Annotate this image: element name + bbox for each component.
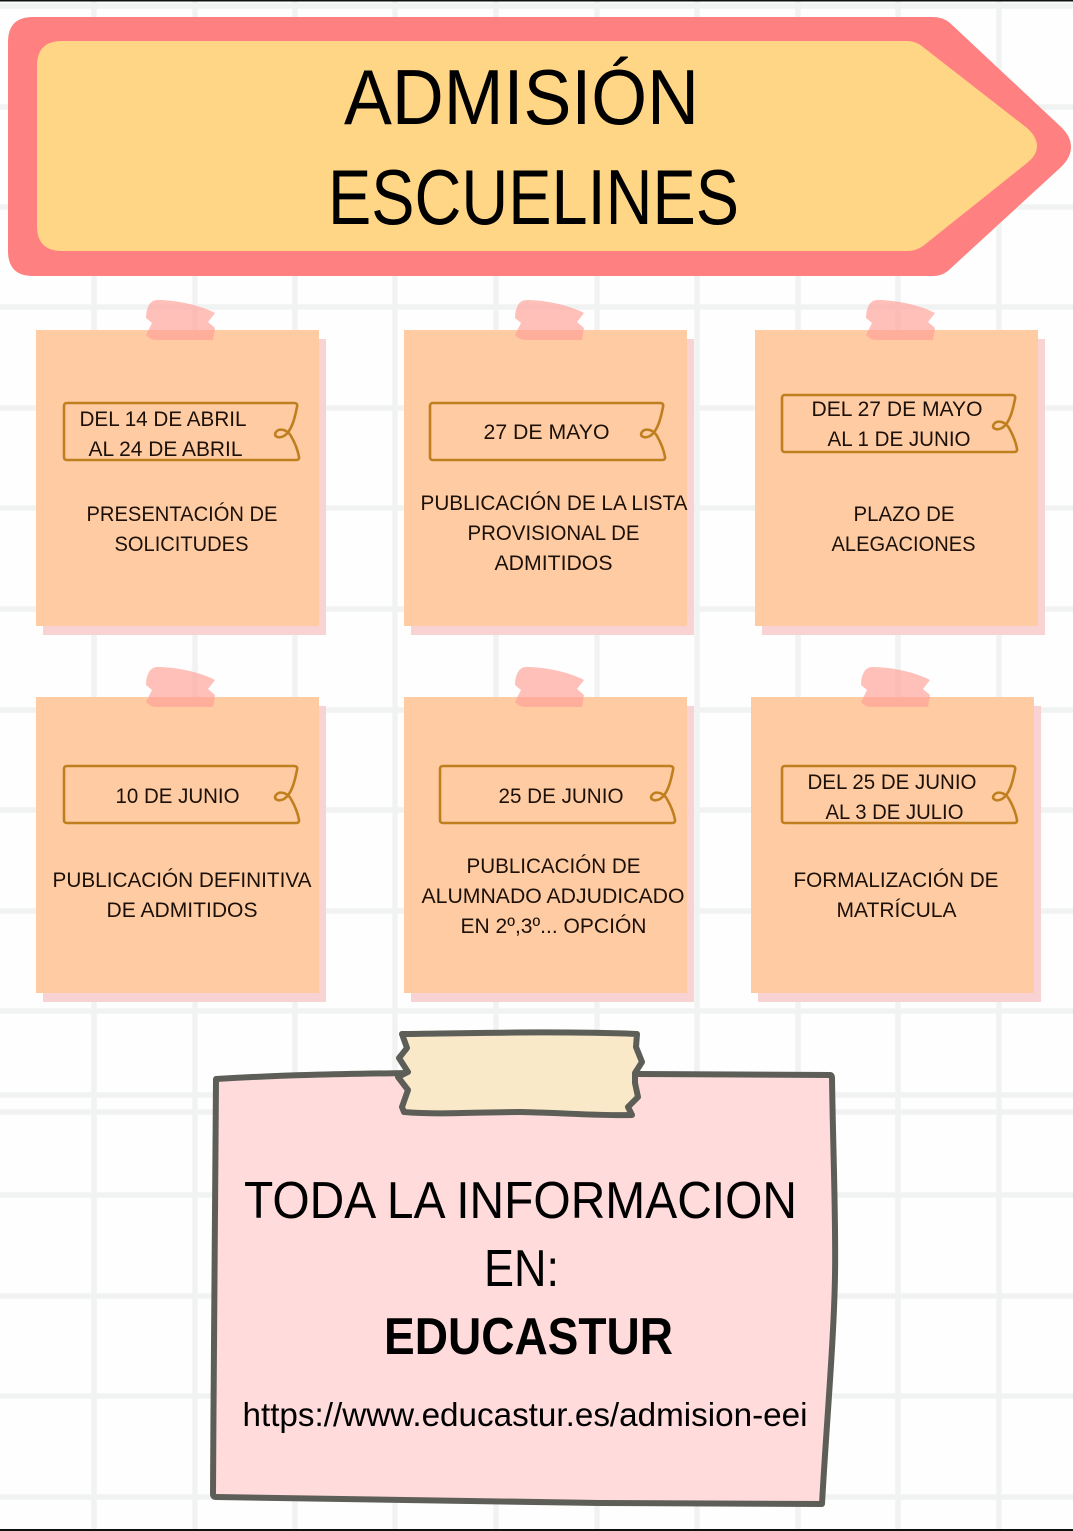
date: 27 DE MAYO <box>484 420 610 444</box>
date: DEL 27 DE MAYO <box>812 397 982 421</box>
date: DEL 14 DE ABRIL <box>80 407 247 431</box>
description: FORMALIZACIÓN DE <box>794 867 998 892</box>
title banner <box>8 17 1071 276</box>
banner outer arrow <box>8 17 1071 276</box>
date end: AL 24 DE ABRIL <box>88 437 243 461</box>
description line 2: SOLICITUDES <box>114 532 248 556</box>
description line 3: ADMITIDOS <box>494 551 612 575</box>
description line 2: ALEGACIONES <box>832 532 976 556</box>
description line 2: DE ADMITIDOS <box>106 898 258 922</box>
banner inner arrow <box>37 41 1037 251</box>
note paper <box>213 1073 835 1504</box>
heading line 1: TODA LA INFORMACION <box>244 1172 797 1230</box>
panel: presentación de solicitudes <box>36 300 326 635</box>
description: PUBLICACIÓN DEFINITIVA <box>52 867 312 892</box>
title line 1: ADMISIÓN <box>344 53 699 141</box>
date: 10 DE JUNIO <box>116 784 240 808</box>
date: DEL 25 DE JUNIO <box>808 770 976 794</box>
description line 3: EN 2º,3º... OPCIÓN <box>460 913 646 938</box>
panel: toda la información <box>213 1032 835 1504</box>
description line 2: MATRÍCULA <box>836 897 957 922</box>
date end: AL 1 DE JUNIO <box>828 427 970 451</box>
description: PRESENTACIÓN DE <box>86 501 278 526</box>
washi tape <box>398 1032 642 1115</box>
description line 2: ALUMNADO ADJUDICADO <box>422 884 684 908</box>
url: https://www.educastur.es/admision-eei <box>242 1396 808 1433</box>
panel: lista provisional <box>404 300 694 635</box>
title line 2: ESCUELINES <box>328 153 739 241</box>
description: PUBLICACIÓN DE LA LISTA <box>420 490 688 515</box>
description: PUBLICACIÓN DE <box>466 853 640 878</box>
educastur: EDUCASTUR <box>384 1308 673 1366</box>
date: 25 DE JUNIO <box>498 784 624 808</box>
date end: AL 3 DE JULIO <box>826 800 964 824</box>
panel: plazo de alegaciones <box>755 300 1045 635</box>
description: PLAZO DE <box>854 502 954 526</box>
panel: alumnado adjudicado <box>404 667 694 1002</box>
heading line 2: EN: <box>484 1240 559 1298</box>
description line 2: PROVISIONAL DE <box>468 521 640 545</box>
panel: publicación definitiva <box>36 667 326 1002</box>
panel: formalización de matrícula <box>751 667 1041 1002</box>
